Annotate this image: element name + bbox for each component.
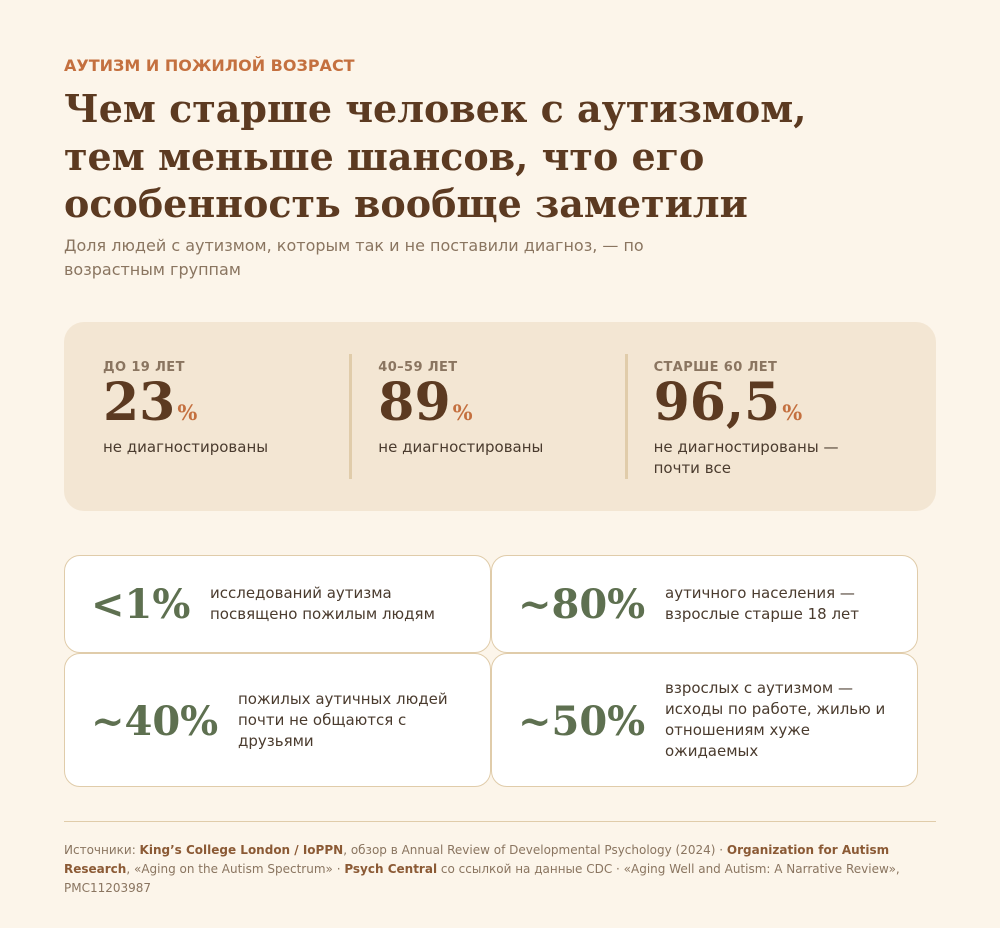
subtitle: Доля людей с аутизмом, которым так и не поставили диагноз, — по — [64, 236, 644, 255]
card: friends share: почти не общаются с — [238, 711, 406, 729]
title — [64, 86, 807, 226]
stat: over 60 years — [654, 360, 838, 477]
subtitle: возрастным группам — [64, 260, 241, 279]
title: особенность вообще заметили — [64, 181, 748, 226]
stat: over 60 years: 96,5% — [654, 372, 802, 433]
stat: over 60 years: СТАРШЕ 60 ЛЕТ — [654, 360, 777, 375]
card: friends share — [64, 653, 491, 787]
stat: up to 19 years: не диагностированы — [103, 438, 268, 456]
stat: up to 19 years — [103, 360, 268, 456]
panel: undiagnosed share by age group — [64, 322, 936, 511]
card: worse outcomes share — [491, 653, 918, 787]
stat: up to 19 years: ДО 19 ЛЕТ — [103, 360, 185, 375]
stat: over 60 years: почти все — [654, 459, 731, 477]
card: friends share: пожилых аутичных людей — [238, 690, 448, 708]
card: autistic adults share: аутичного населения — — [665, 584, 855, 602]
card: research share — [64, 555, 491, 653]
card: friends share: друзьями — [238, 732, 314, 750]
stat: 40-59 years: 40–59 ЛЕТ — [378, 360, 458, 375]
subtitle — [64, 236, 644, 279]
sources: Research, «Aging on the Autism Spectrum» · Psych Central со ссылкой на данные CDC · «Aging Well and Autism: A Narrative Review», — [64, 862, 900, 876]
card: autistic adults share: взрослые старше 18 лет — [665, 605, 859, 623]
stat: up to 19 years: 23% — [103, 372, 197, 433]
card: worse outcomes share: взрослых с аутизмом — — [665, 679, 853, 697]
card: autistic adults share: ~80% — [518, 581, 645, 628]
sources: PMC11203987 — [64, 881, 151, 895]
eyebrow heading: АУТИЗМ И ПОЖИЛОЙ ВОЗРАСТ — [64, 56, 355, 75]
card: worse outcomes share: исходы по работе, жилью и — [665, 700, 885, 718]
card: friends share: ~40% — [91, 698, 218, 745]
title: тем меньше шансов, что его — [64, 134, 704, 179]
stat: over 60 years: не диагностированы — — [654, 438, 838, 456]
sources — [64, 843, 900, 895]
card: worse outcomes share: отношениям хуже — [665, 721, 810, 739]
card: research share: посвящено пожилым людям — [210, 605, 435, 623]
stat: 40-59 years: не диагностированы — [378, 438, 543, 456]
card: worse outcomes share: ожидаемых — [665, 742, 758, 760]
stat: 40-59 years: 89% — [378, 372, 473, 433]
stat: 40-59 years — [378, 360, 543, 456]
card: autistic adults share — [491, 555, 918, 653]
card: research share: исследований аутизма — [210, 584, 392, 602]
card: research share: <1% — [91, 581, 190, 628]
sources: Источники: King’s College London / IoPPN, обзор в Annual Review of Developmental Psychology (2024) · Organization for Autism — [64, 843, 889, 857]
card: worse outcomes share: ~50% — [518, 698, 645, 745]
title: Чем старше человек с аутизмом, — [64, 86, 807, 131]
